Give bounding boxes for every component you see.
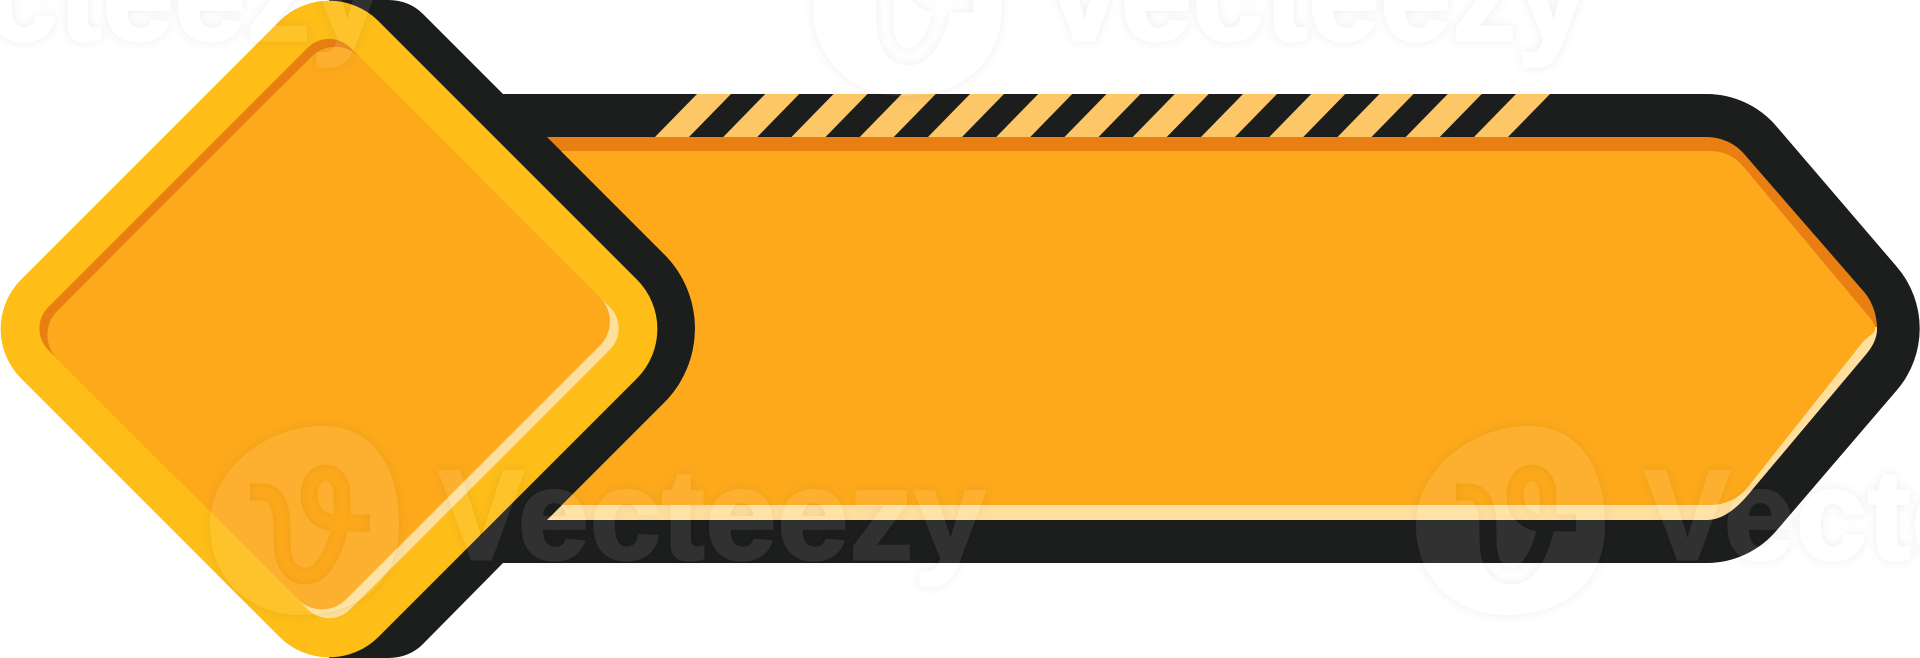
watermark: top centre bbox=[813, 0, 1588, 96]
diamond bevel: dark upper-left and cream lower-right edges bbox=[27, 26, 631, 631]
diamond orange face bbox=[33, 33, 624, 624]
hazard stripes bbox=[655, 94, 1550, 137]
banner main orange panel bbox=[561, 151, 1875, 505]
watermark: bottom right bbox=[1416, 426, 1920, 615]
diamond yellow plate bbox=[0, 0, 686, 658]
watermark: bottom left: Vecteezy bbox=[439, 444, 985, 586]
diamond badge bbox=[0, 0, 686, 658]
watermark: bottom left bbox=[210, 426, 985, 615]
banner bevel: dark top edge and cream bottom edge bbox=[547, 137, 1877, 520]
